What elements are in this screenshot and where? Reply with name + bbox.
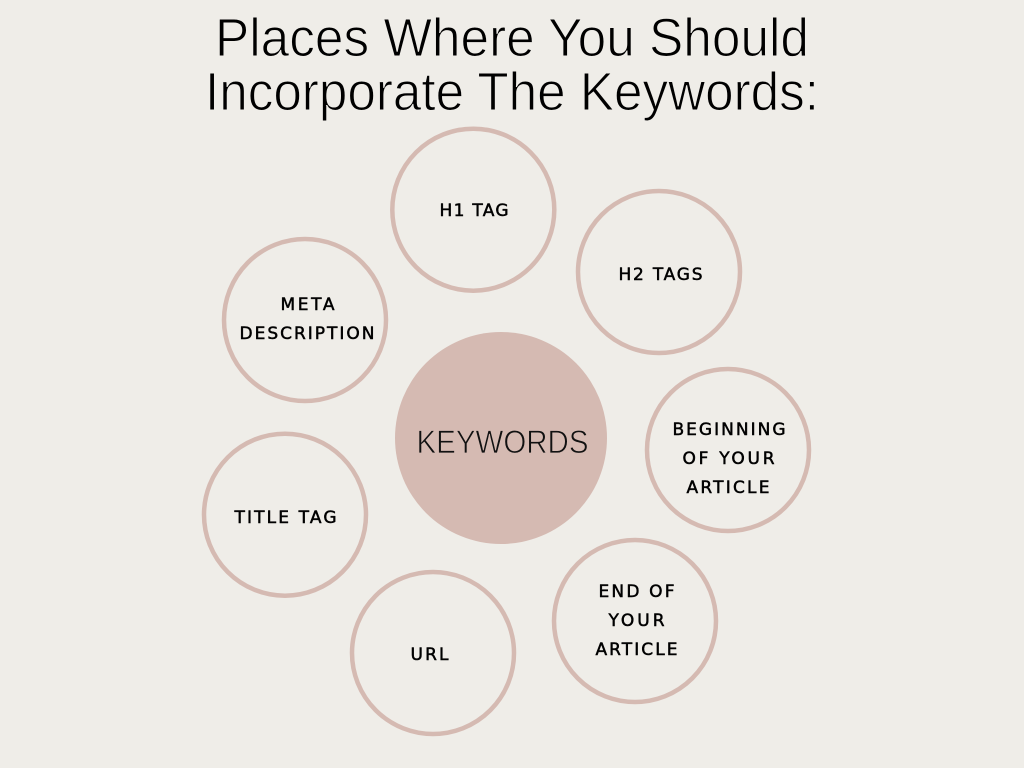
center circle: keywords — [395, 332, 607, 544]
circle: end of your article — [554, 540, 716, 702]
circle: H2 tags: H2 TAGS — [618, 265, 702, 285]
circle: end of your article: ARTICLE — [596, 640, 678, 660]
circle: beginning of your article: BEGINNING — [672, 420, 786, 440]
circle: meta description — [224, 239, 386, 401]
circle: title tag: TITLE TAG — [234, 508, 336, 528]
circle: meta description: DESCRIPTION — [240, 324, 374, 344]
circle: end of your article: END OF — [598, 582, 674, 602]
circle: end of your article: YOUR — [608, 611, 665, 631]
circle: meta description: META — [280, 295, 335, 315]
title: Incorporate The Keywords: — [205, 62, 819, 122]
circle: beginning of your article — [647, 369, 809, 531]
circle: H1 tag: H1 TAG — [440, 201, 508, 221]
circle: title tag — [204, 434, 366, 596]
circle: H1 tag — [392, 129, 554, 291]
circle: H2 tags — [578, 191, 740, 353]
circle: beginning of your article: ARTICLE — [686, 478, 770, 498]
title — [205, 8, 819, 122]
circle: URL: URL — [410, 645, 449, 665]
circle: beginning of your article: OF YOUR — [682, 449, 775, 469]
center circle: keywords: KEYWORDS — [416, 424, 588, 460]
circle: URL — [352, 572, 514, 734]
title: Places Where You Should — [215, 8, 809, 68]
